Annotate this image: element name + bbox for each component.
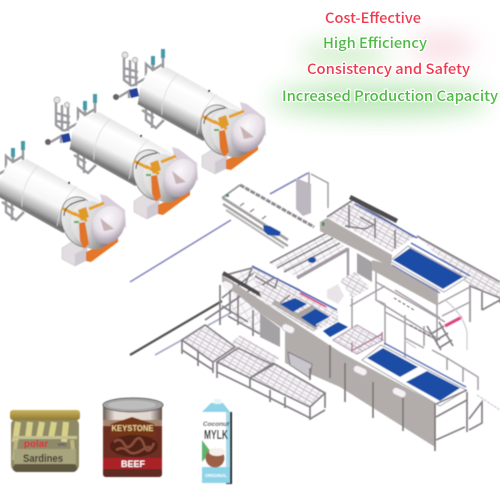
- benefit: increased production capacity: Increased Production Capacity: [282, 86, 498, 106]
- right frame and stairs: [327, 266, 470, 360]
- benefit: cost-effective: Cost-Effective: [325, 8, 421, 28]
- cross conveyor: [270, 233, 348, 280]
- benefits list: [282, 8, 498, 106]
- product: coconut milk carton: [202, 399, 232, 484]
- end frame: [432, 350, 500, 440]
- lower blue tanks: [362, 343, 466, 406]
- benefit: consistency and safety: Consistency and Safety: [307, 59, 470, 79]
- electrical cabinet: [296, 172, 328, 216]
- right outfeed conveyor: [417, 236, 500, 322]
- product: sardine jar: wild: [58, 442, 67, 448]
- long pipes: [130, 173, 308, 355]
- upper infeed conveyor: [222, 185, 314, 248]
- product: coconut milk carton: ORIGINAL: [205, 473, 227, 478]
- lower wall supports: [205, 266, 300, 336]
- product: sardine jar: Sardines: [23, 453, 63, 465]
- can label text: KEYSTONE: [112, 424, 154, 433]
- retort sterilizers: [0, 49, 272, 266]
- product: coconut milk carton: MYLK: [204, 427, 228, 442]
- production line: [130, 172, 500, 451]
- product: beef can: [103, 398, 163, 477]
- upper frame behind wall: [327, 197, 417, 252]
- can tray: [333, 325, 383, 354]
- upper blue tank: [390, 243, 470, 293]
- wall sensors: [221, 280, 407, 399]
- retort: bottom: [0, 141, 132, 266]
- retort: top: [113, 49, 272, 174]
- jar label text: polar: [24, 439, 48, 450]
- lower frame top: [252, 266, 338, 332]
- upper process wall: [320, 218, 438, 306]
- middle blue tanks: [280, 298, 348, 337]
- product: sardine jar: [10, 410, 80, 472]
- benefit: high efficiency: High Efficiency: [323, 33, 427, 53]
- carton label text: Coconut: [203, 421, 230, 428]
- lower left roller conveyors: [182, 325, 325, 420]
- product: beef can: BEEF: [121, 459, 145, 469]
- lower process wall: [222, 273, 435, 451]
- background glow: [270, 33, 490, 116]
- retort: middle: [45, 94, 204, 219]
